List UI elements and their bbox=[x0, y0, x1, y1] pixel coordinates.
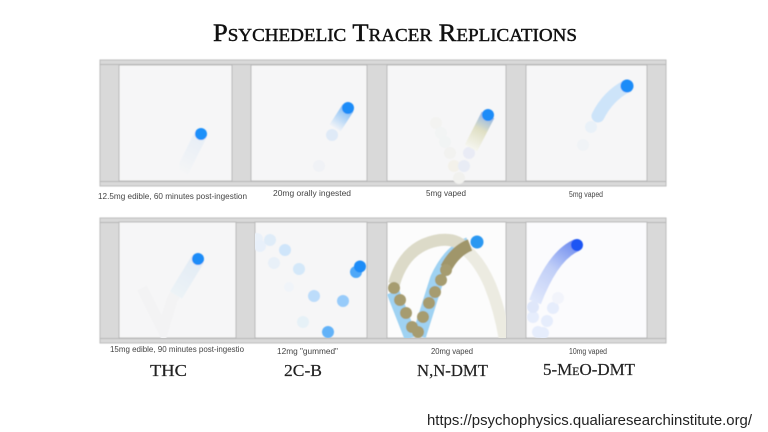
panel: bottom row of tracer screenshots bbox=[100, 218, 666, 343]
caption: 20mg orally ingested bbox=[273, 189, 351, 198]
caption: 20mg vaped bbox=[431, 347, 473, 356]
caption: 12mg "gummed" bbox=[277, 347, 338, 356]
caption: 5mg vaped bbox=[426, 189, 466, 198]
chart: N,N-DMT 20mg tracer bbox=[388, 236, 505, 340]
label: THC: THC bbox=[150, 361, 187, 380]
chart: 2C-B 12mg tracer bbox=[251, 233, 366, 338]
chart: 2C-B 20mg tracer bbox=[313, 102, 354, 172]
source URL: https://psychophysics.qualiaresearchinstitute.org/ bbox=[427, 413, 753, 429]
label: N,N-DMT: N,N-DMT bbox=[417, 361, 489, 380]
chart: 5-MeO-DMT 10mg tracer bbox=[527, 239, 583, 339]
label: 2C-B: 2C-B bbox=[284, 361, 322, 380]
caption: 10mg vaped bbox=[569, 347, 607, 356]
chart: N,N-DMT 5mg tracer bbox=[430, 109, 494, 184]
caption: 5mg vaped bbox=[569, 190, 603, 199]
panel: top row of tracer screenshots bbox=[100, 60, 666, 186]
label: 5-MeO-DMT: 5-MeO-DMT bbox=[543, 360, 636, 379]
chart: THC 12.5mg tracer bbox=[182, 128, 207, 172]
caption: 12.5mg edible, 60 minutes post-ingestion bbox=[98, 192, 247, 201]
caption: 15mg edible, 90 minutes post-ingestio bbox=[110, 345, 245, 354]
chart: 5-MeO-DMT 5mg tracer bbox=[577, 80, 634, 151]
chart: THC 15mg tracer bbox=[142, 253, 204, 330]
title: Psychedelic Tracer Replications bbox=[213, 20, 577, 47]
